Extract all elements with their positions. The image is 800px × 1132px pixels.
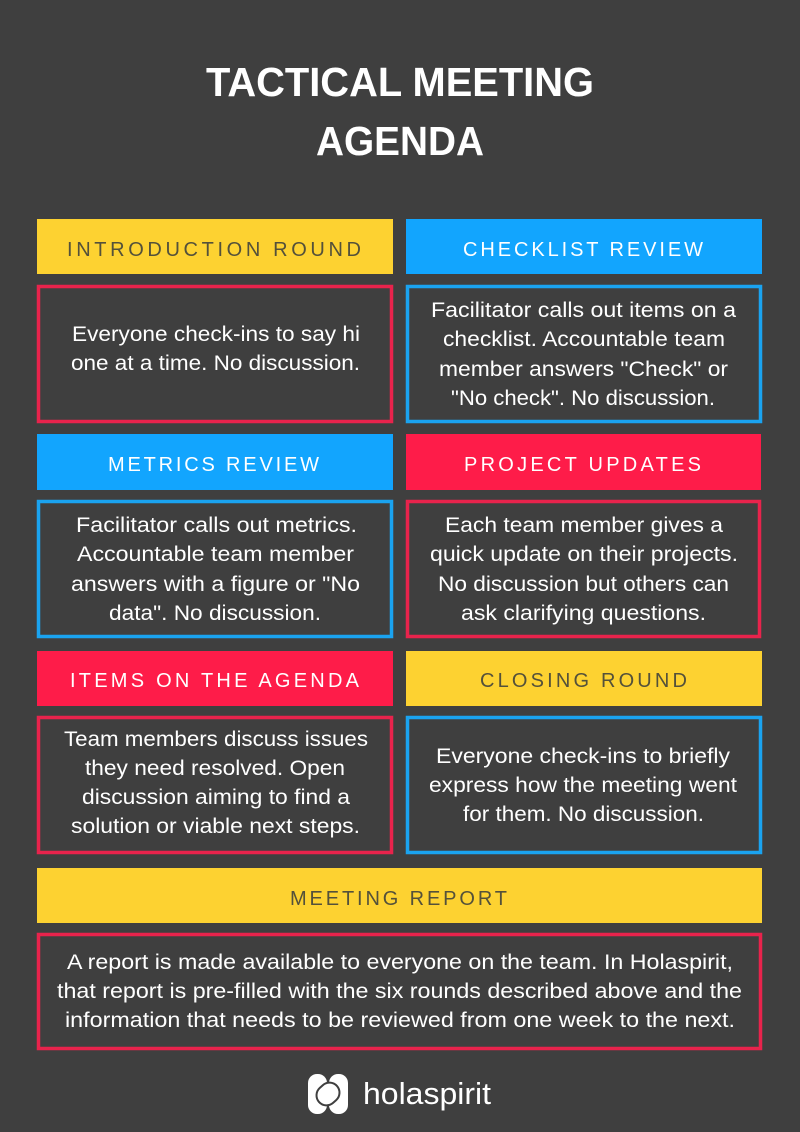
text block: checklist review: "No check". No discussion.	[451, 386, 715, 410]
heading: checklist review: CHECKLIST REVIEW	[463, 239, 706, 261]
heading: meeting report: MEETING REPORT	[290, 888, 510, 910]
title	[206, 59, 594, 164]
text block: closing round: for them. No discussion.	[463, 802, 704, 826]
text block: closing round: express how the meeting went	[429, 773, 737, 797]
text block: introduction round: one at a time. No discussion.	[71, 351, 360, 375]
heading: introduction round: INTRODUCTION ROUND	[67, 239, 364, 261]
text block: closing round	[408, 718, 760, 852]
panel: metrics review	[37, 434, 393, 636]
text block: metrics review: data". No discussion.	[109, 601, 321, 625]
heading: project updates	[406, 434, 761, 490]
logo: holaspirit: holaspirit	[363, 1076, 491, 1111]
icon: holaspirit mark	[308, 1074, 348, 1114]
logo: holaspirit	[308, 1074, 491, 1114]
text block: meeting report: A report is made available to everyone on the team. In Holaspirit,	[67, 950, 733, 974]
text block: metrics review: answers with a figure or "No	[71, 572, 360, 596]
panel: project updates	[406, 434, 761, 636]
text block: project updates: No discussion but others can	[438, 572, 729, 596]
heading: project updates: PROJECT UPDATES	[464, 454, 704, 476]
text block: checklist review	[408, 286, 760, 422]
panel: checklist review	[406, 219, 762, 422]
text block: checklist review: member answers "Check" or	[439, 357, 728, 381]
title: TACTICAL MEETING	[206, 59, 594, 105]
text block: meeting report: information that needs to be reviewed from one week to the next.	[65, 1008, 735, 1032]
text block: metrics review: Accountable team member	[77, 542, 354, 566]
heading: items on the agenda: ITEMS ON THE AGENDA	[70, 670, 362, 692]
text block: project updates: quick update on their projects.	[430, 542, 738, 566]
text block: items on the agenda: solution or viable next steps.	[71, 814, 360, 838]
text block: checklist review: checklist. Accountable team	[443, 327, 725, 351]
heading: checklist review	[406, 219, 762, 274]
heading: items on the agenda	[37, 651, 393, 706]
text block: meeting report	[38, 934, 760, 1048]
title: AGENDA	[316, 118, 484, 164]
text block: items on the agenda	[38, 718, 392, 852]
heading: closing round: CLOSING ROUND	[480, 670, 690, 692]
text block: metrics review: Facilitator calls out metrics.	[76, 513, 357, 537]
text block: project updates: ask clarifying questions.	[461, 601, 706, 625]
panel: introduction round	[37, 219, 393, 422]
heading: meeting report	[37, 868, 762, 923]
heading: metrics review: METRICS REVIEW	[108, 454, 322, 476]
text block: checklist review: Facilitator calls out items on a	[431, 298, 736, 322]
text block: project updates: Each team member gives a	[445, 513, 723, 537]
heading: introduction round	[37, 219, 393, 274]
text block: items on the agenda: Team members discuss issues	[64, 727, 368, 751]
text block: metrics review	[38, 502, 392, 636]
text block: closing round: Everyone check-ins to briefly	[436, 744, 730, 768]
text block: items on the agenda: they need resolved. Open	[85, 756, 345, 780]
heading: closing round	[406, 651, 762, 706]
heading: metrics review	[37, 434, 393, 490]
text block: items on the agenda: discussion aiming to find a	[82, 785, 350, 809]
text block: introduction round	[38, 286, 392, 422]
panel: closing round	[406, 651, 762, 852]
panel: meeting report	[37, 868, 762, 1048]
text block: introduction round: Everyone check-ins to say hi	[72, 322, 360, 346]
text block: meeting report: that report is pre-filled with the six rounds described above and the	[57, 979, 742, 1003]
text block: project updates	[408, 502, 760, 636]
panel: items on the agenda	[37, 651, 393, 852]
